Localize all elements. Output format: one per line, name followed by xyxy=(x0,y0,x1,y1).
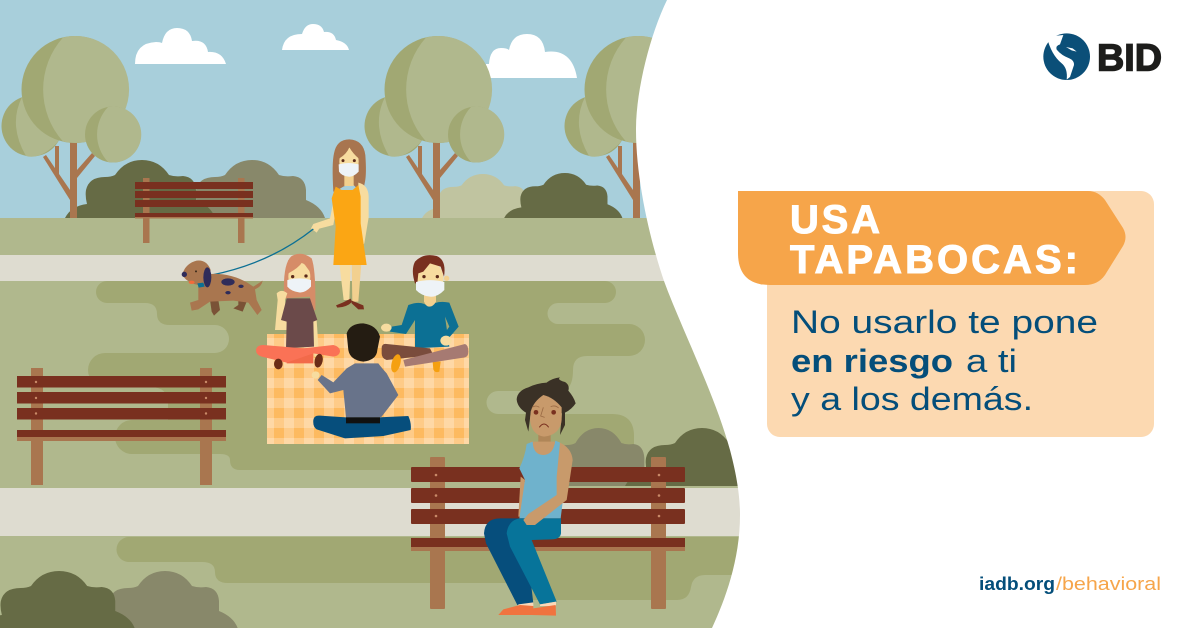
background bushes xyxy=(65,160,622,218)
cloud right xyxy=(486,34,577,78)
bench: small, background xyxy=(135,178,253,243)
park scene xyxy=(0,0,775,628)
body text: a ti xyxy=(966,343,1017,379)
website link xyxy=(979,574,1161,594)
heading: TAPABOCAS: xyxy=(790,238,1078,282)
near arm behind tank xyxy=(518,477,525,517)
tree right xyxy=(564,36,704,218)
darker grass patch xyxy=(88,281,645,470)
body text: en riesgo xyxy=(791,343,953,379)
heading: USA xyxy=(790,198,880,242)
lawn xyxy=(0,218,760,628)
seated girl with mask xyxy=(256,254,340,369)
hair xyxy=(517,377,576,435)
wordmark: BID xyxy=(1097,38,1162,80)
standing woman in orange dress xyxy=(311,139,369,309)
tank top xyxy=(519,441,567,518)
man seen from behind xyxy=(312,323,411,438)
ankles xyxy=(518,602,556,607)
seated boy with mask xyxy=(381,255,468,373)
bottom-left bushes xyxy=(0,571,238,628)
dark leg xyxy=(484,518,533,605)
unmasked woman sitting on bench xyxy=(484,377,576,616)
bench: foreground xyxy=(411,457,685,609)
cloud left xyxy=(135,28,226,64)
panel background xyxy=(767,191,1154,437)
cloud middle xyxy=(282,24,349,50)
chest xyxy=(530,442,557,460)
heading xyxy=(790,198,1078,282)
website link: iadb.org xyxy=(979,574,1055,594)
light leg xyxy=(507,518,561,604)
heading tab xyxy=(738,191,1126,285)
face xyxy=(530,395,562,437)
shoes xyxy=(498,605,556,616)
body text: y a los demás. xyxy=(791,381,1033,417)
lower grass patch xyxy=(116,537,760,600)
sky xyxy=(0,0,760,220)
tree middle xyxy=(364,36,504,218)
eyes and mouth xyxy=(532,406,559,427)
body text xyxy=(791,304,1098,417)
lower path xyxy=(0,488,760,536)
upper path xyxy=(0,255,760,281)
dog xyxy=(182,261,263,316)
neck xyxy=(538,433,551,442)
right-side bushes xyxy=(533,428,775,486)
tree left xyxy=(2,36,141,218)
logo: BID xyxy=(1043,33,1162,80)
website link: /behavioral xyxy=(1056,574,1161,594)
panel: message xyxy=(738,191,1154,437)
dog leash xyxy=(212,229,313,275)
white curved background xyxy=(636,0,1200,628)
bench: left xyxy=(17,368,226,485)
body text: No usarlo te pone xyxy=(791,304,1098,340)
group of people and dog xyxy=(182,139,468,438)
picnic blanket xyxy=(267,334,469,444)
icon: globe xyxy=(1043,33,1090,80)
arm xyxy=(523,443,573,525)
